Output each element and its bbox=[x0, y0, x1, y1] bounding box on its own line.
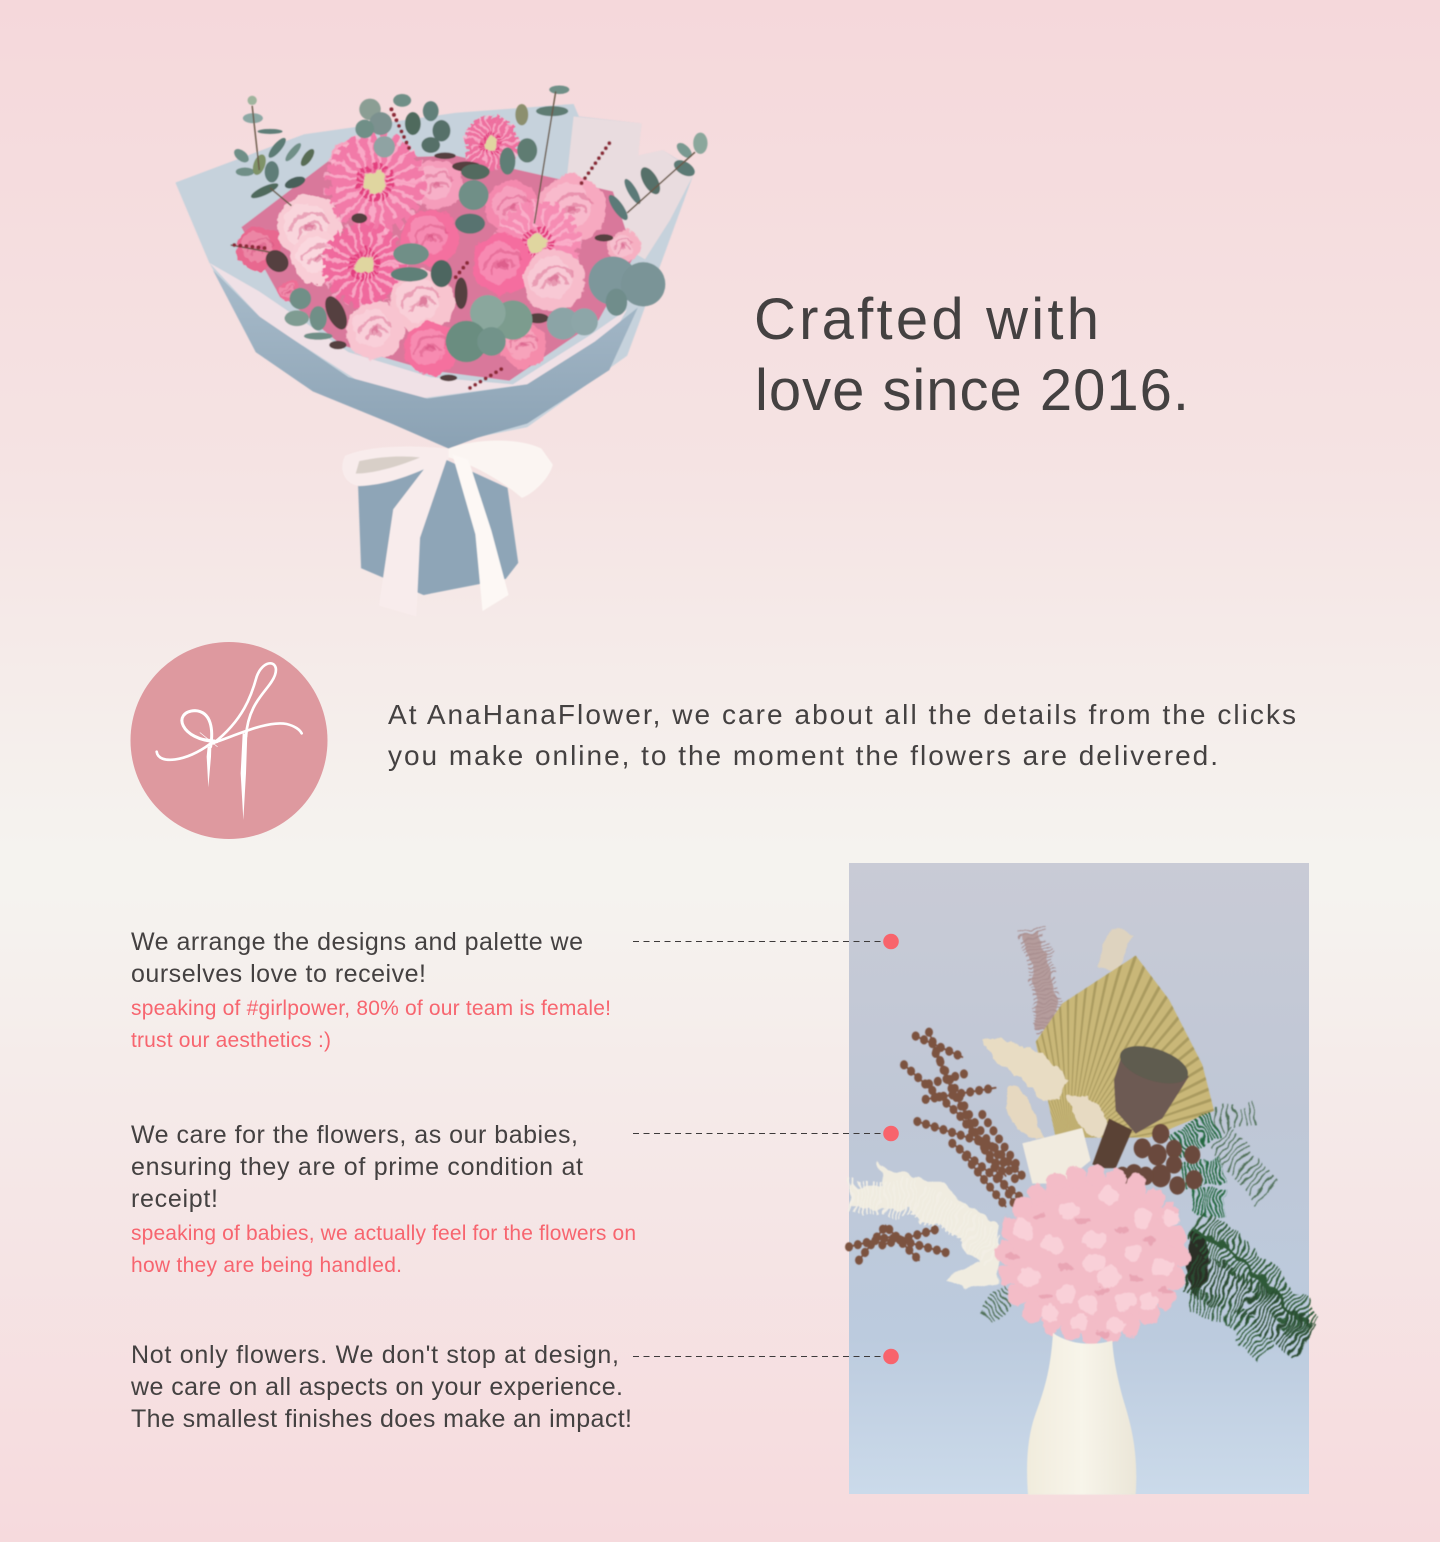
front blue wrap bbox=[213, 270, 638, 449]
flowers bbox=[237, 118, 640, 375]
white ribbon bow bbox=[342, 441, 553, 616]
back wrapping paper bbox=[175, 104, 695, 441]
callout 2 main text bbox=[131, 1121, 583, 1213]
callout 1 main text: We arrange the designs and palette we bbox=[131, 928, 583, 956]
callout 3: finishing touches bbox=[130, 1341, 899, 1433]
lotus pod bbox=[1114, 1053, 1189, 1134]
callout 2 pink note: speaking of babies, we actually feel for the flowers on bbox=[131, 1222, 636, 1245]
white vase bbox=[1027, 1333, 1136, 1495]
green fern bbox=[986, 1115, 1309, 1356]
fluffy bunny tails bbox=[982, 1039, 1107, 1140]
callout 1 pink note: trust our aesthetics :) bbox=[131, 1029, 331, 1052]
berries bbox=[234, 109, 609, 388]
brown berry branches bbox=[849, 1032, 1022, 1260]
callout 1 main text: ourselves love to receive! bbox=[131, 960, 426, 988]
callout 1 pink note bbox=[131, 997, 611, 1052]
heading: Crafted with bbox=[754, 287, 1099, 352]
callout 1 pink note: speaking of #girlpower, 80% of our team is female! bbox=[131, 997, 611, 1020]
eucalyptus leaves bbox=[231, 85, 707, 362]
dark foliage shadows bbox=[261, 152, 613, 381]
brown seed pods bbox=[1114, 1124, 1202, 1195]
golden palm fan bbox=[1035, 955, 1214, 1138]
logo monogram bbox=[157, 663, 302, 820]
callout 3 main text: we care on all aspects on your experience. bbox=[130, 1373, 623, 1401]
inner pink paper bbox=[563, 116, 695, 259]
pale tissue paper bbox=[209, 263, 627, 402]
callout 2 main text: We care for the flowers, as our babies, bbox=[131, 1121, 578, 1149]
white wrapped stems bbox=[1022, 1128, 1091, 1184]
callout 2 main text: receipt! bbox=[131, 1185, 218, 1213]
callout 1 main text bbox=[131, 928, 583, 988]
callout 2 connector bbox=[633, 1126, 899, 1141]
intro paragraph: you make online, to the moment the flowers are delivered. bbox=[388, 740, 1218, 771]
callout 3 main text: Not only flowers. We don't stop at design, bbox=[131, 1341, 619, 1369]
logo badge bbox=[130, 642, 328, 839]
callout 3 main text bbox=[130, 1341, 632, 1433]
heading bbox=[754, 287, 1189, 423]
callout 3 main text: The smallest finishes does make an impact! bbox=[131, 1405, 632, 1433]
callout 3 connector bbox=[633, 1349, 899, 1364]
intro paragraph: At AnaHanaFlower, we care about all the details from the clicks bbox=[388, 699, 1296, 730]
callout 2 pink note: how they are being handled. bbox=[131, 1254, 402, 1277]
callout 1: designs and palette bbox=[131, 928, 899, 1052]
intro paragraph bbox=[388, 699, 1296, 771]
pink hydrangea bbox=[1005, 1176, 1180, 1338]
dried flower photo bbox=[849, 863, 1309, 1495]
flower bed bbox=[241, 156, 634, 381]
pot wrap bbox=[357, 459, 518, 595]
callout 2: caring for flowers bbox=[131, 1121, 899, 1277]
callout 2 main text: ensuring they are of prime condition at bbox=[131, 1153, 583, 1181]
white feather sprig bbox=[849, 1164, 999, 1289]
callout 1 connector bbox=[633, 934, 899, 949]
heading: love since 2016. bbox=[755, 358, 1189, 423]
callout 2 pink note bbox=[131, 1222, 636, 1277]
pampas plumes bbox=[1031, 931, 1122, 1034]
bouquet photo: pink flowers wrapped in blue paper bbox=[175, 85, 707, 616]
